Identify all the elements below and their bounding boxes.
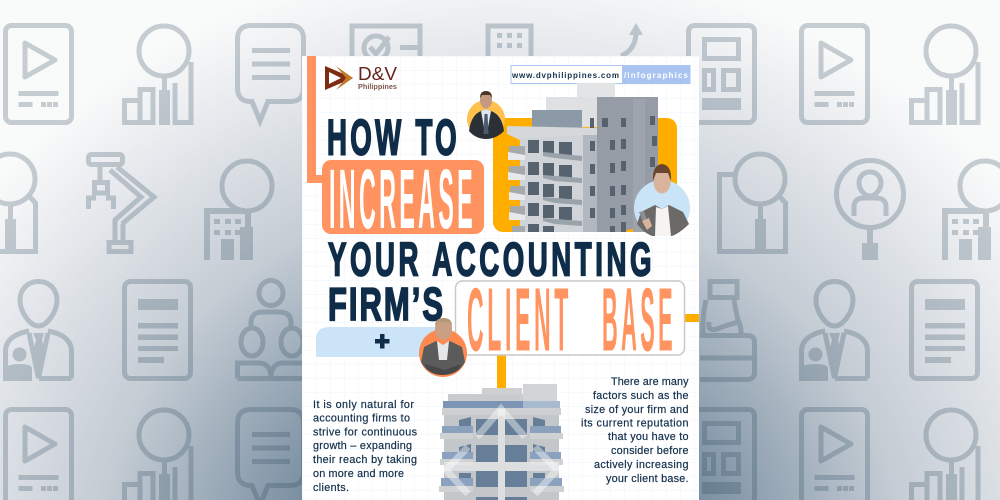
text: intro paragraph right: size of your firm and bbox=[585, 404, 688, 416]
lower tower windows bbox=[459, 417, 545, 500]
icon: layout document bbox=[688, 26, 754, 122]
text: intro paragraph left: on more and more bbox=[313, 468, 404, 480]
website address bar bbox=[511, 65, 690, 84]
portrait: man with crossed arms bbox=[419, 318, 467, 377]
text: intro paragraph right: There are many bbox=[611, 376, 689, 388]
text: intro paragraph right: your client base. bbox=[606, 473, 688, 485]
building illustration: lower tower with arrows bbox=[439, 384, 564, 500]
connector: vertical yellow line bbox=[497, 355, 506, 389]
title: YOUR ACCOUNTING: YOUR ACCOUNTING bbox=[328, 232, 655, 286]
text: INCREASE bbox=[329, 152, 476, 246]
logo: D&V Philippines bbox=[325, 63, 398, 91]
icon: magnifier over building bbox=[204, 161, 272, 260]
overlay: growth arrows bbox=[446, 409, 557, 494]
icon: office building bbox=[488, 26, 531, 56]
text: intro paragraph right: consider before bbox=[611, 445, 688, 457]
portrait: man in dark suit bbox=[467, 91, 505, 139]
lower tower balconies bbox=[439, 426, 564, 492]
icon: checklist document bbox=[352, 26, 420, 60]
text: intro paragraph left bbox=[313, 399, 418, 494]
website address bar: www.dvphilippines.com bbox=[511, 71, 619, 80]
text: intro paragraph right: factors such as the bbox=[593, 390, 688, 402]
text: intro paragraph right: its current reputation bbox=[581, 418, 688, 430]
text: intro paragraph right bbox=[581, 376, 689, 485]
building windows bbox=[528, 116, 657, 232]
icon: growth arrow bbox=[621, 23, 643, 56]
icon: magnifier over person bbox=[836, 160, 904, 260]
icon: speech bubble bbox=[238, 26, 304, 121]
connector: right yellow stub bbox=[684, 314, 699, 322]
icon: magnifier over bar chart bbox=[124, 26, 191, 125]
accent: orange L bracket bbox=[307, 56, 322, 183]
title: HOW TO: HOW TO bbox=[327, 110, 460, 166]
icon: video document bbox=[6, 26, 72, 122]
text: intro paragraph left: strive for continuous bbox=[313, 426, 418, 438]
text: intro paragraph left: accounting firms to bbox=[313, 412, 410, 424]
logo: D&V Philippines: D&V bbox=[358, 63, 398, 84]
text: intro paragraph left: It is only natural for bbox=[313, 399, 414, 411]
icon: robot arm bbox=[88, 154, 154, 252]
text: intro paragraph left: clients. bbox=[313, 482, 349, 494]
website address bar: /infographics bbox=[624, 71, 689, 80]
building balconies bbox=[508, 146, 582, 232]
text: BASE bbox=[602, 270, 676, 370]
title: CLIENT BASE badge: CLIENT bbox=[467, 270, 572, 370]
icon: presenter group bbox=[238, 280, 304, 378]
title: CLIENT BASE badge bbox=[456, 270, 684, 370]
logo: D&V Philippines: Philippines bbox=[358, 82, 397, 91]
icon: hand on stack bbox=[700, 282, 754, 380]
text: intro paragraph right: actively increasing bbox=[594, 459, 688, 471]
panel: infographic page bbox=[302, 56, 699, 500]
text: intro paragraph right: that you have to bbox=[608, 431, 688, 443]
title: FIRM'S: FIRM’S bbox=[328, 278, 445, 330]
icon: person with client bbox=[3, 282, 72, 381]
plus tab bbox=[316, 327, 440, 357]
building illustration: top tower bbox=[507, 83, 658, 232]
yellow backdrop block bbox=[493, 118, 677, 232]
icon: magnifier over document bbox=[0, 154, 36, 252]
text: intro paragraph left: growth – expanding bbox=[313, 440, 412, 452]
text: intro paragraph left: their reach by taking bbox=[313, 454, 417, 466]
icon: text document bbox=[124, 282, 190, 378]
portrait: woman with phone bbox=[634, 164, 690, 236]
title: INCREASE badge bbox=[322, 152, 484, 246]
